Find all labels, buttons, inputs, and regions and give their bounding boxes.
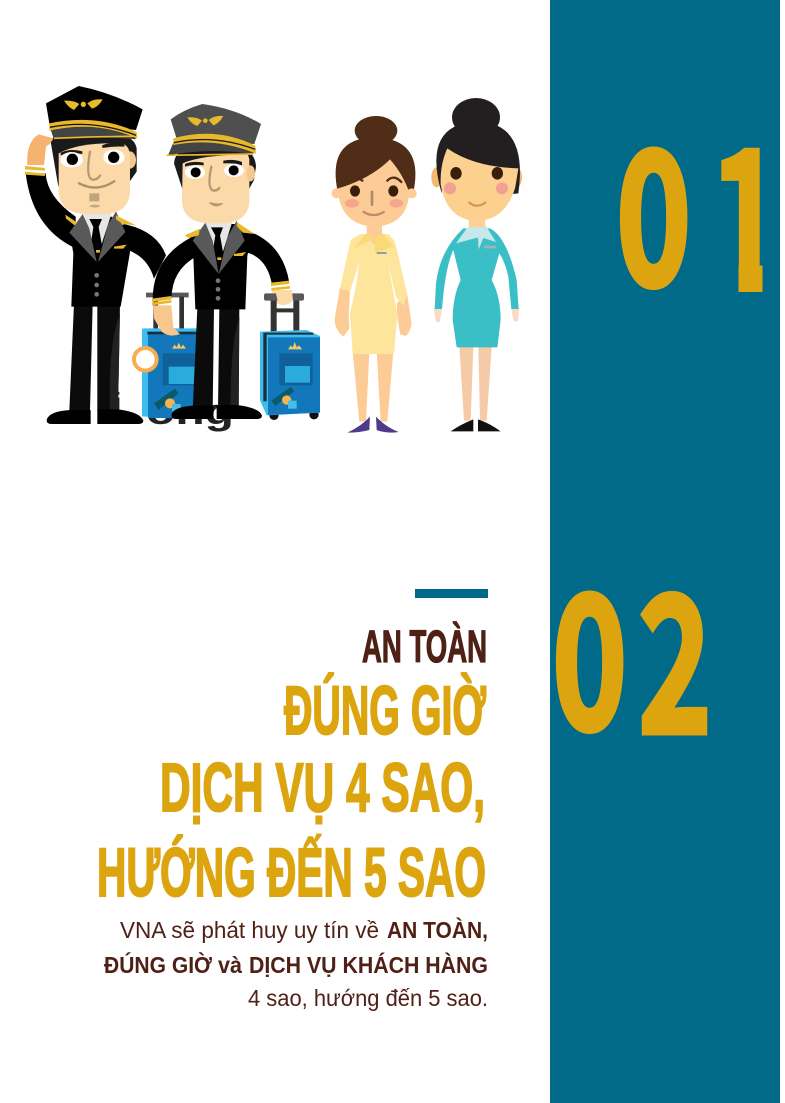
body text: DỊCH VỤ KHÁCH HÀNG [249,951,488,978]
face [441,148,518,221]
trousers [69,303,120,411]
collar [354,233,394,253]
body text [104,916,488,1011]
number 02: 0 [552,515,627,783]
lowered arm [123,224,166,279]
number 01: 1 [708,63,785,347]
buttons [94,273,99,297]
smile [469,203,485,206]
arms [335,287,412,337]
epaulettes [65,215,136,225]
cheeks [345,199,359,208]
shirt [205,222,232,252]
shirt [83,213,112,244]
raised cuff [25,166,45,176]
body text: và [218,952,242,978]
tie [89,219,102,255]
collar [456,226,496,249]
nose [368,192,376,205]
hat crown [171,104,261,144]
panel: teal column [550,0,780,1103]
hat band [173,134,256,154]
attendant in yellow [332,116,417,433]
heading line: dich vu 4 sao: DỊCH VỤ 4 SAO, [160,749,485,826]
raised arm [25,173,76,248]
smile [364,212,384,215]
brows [185,160,242,167]
hair [336,137,415,192]
brows [348,178,401,183]
hat wings [187,116,223,126]
legs [459,347,492,421]
mouth [209,203,223,206]
hands [434,308,519,322]
hat visor [168,140,255,155]
illustration: two flight attendants and second suitcase [260,98,522,433]
raised hand [27,134,53,165]
hair [174,150,256,193]
bun [355,116,397,145]
number 01 [616,63,785,347]
right hand and cuff [272,290,292,304]
eyes [185,166,205,179]
left cuff and hand [153,305,180,336]
face [337,159,409,227]
name badge [377,252,387,254]
shoes [347,417,399,433]
buttons [216,278,220,301]
jacket [190,224,252,309]
shoes [47,409,143,424]
badge [96,245,127,253]
heading line: dung gio: ĐÚNG GIỜ [284,672,486,749]
ear [124,151,136,169]
suitcase behind pilot [142,293,199,418]
accent bar [415,589,488,598]
body text: 4 sao, hướng đến 5 sao. [248,985,488,1011]
body text: ĐÚNG GIỜ [104,951,212,978]
nose [88,152,100,180]
neck [367,222,382,245]
watermark letters behind the illustration [114,387,234,432]
trousers [193,308,239,410]
hat visor [49,123,137,139]
shoes [451,419,501,431]
ear [246,165,255,181]
eyes [350,185,360,197]
ears [431,167,442,187]
badge [217,252,246,260]
hair [51,134,137,187]
second suitcase [260,291,320,420]
left arm [153,237,196,300]
tie [211,227,223,261]
ears [332,188,342,198]
cheeks [444,182,456,194]
jacket [69,217,130,307]
body text: AN TOÀN, [387,916,488,943]
lapels [69,211,125,262]
attendant in teal [431,98,522,431]
watermark letters behind the illustration: i [114,387,121,417]
epaulettes [185,222,255,238]
nose [209,167,219,191]
heading line: huong den 5 sao: HƯỚNG ĐẾN 5 SAO [97,834,486,911]
body text: VNA sẽ phát huy uy tín về [120,917,379,943]
number 02: 2 [638,513,712,788]
neck [469,215,485,238]
right arm [241,229,289,285]
legs [353,352,393,422]
number 01: 0 [616,71,691,339]
name badge [484,246,496,248]
brows [61,143,125,155]
illustration: two pilots with suitcases [25,86,292,424]
beard [89,193,101,208]
lapels [193,221,245,274]
pilot one [25,86,166,424]
face [59,143,130,214]
shoes [171,405,262,419]
heading [97,621,487,911]
face [182,155,249,223]
sleeves and dress [340,234,407,354]
smile [79,181,114,188]
hair [436,122,520,195]
eyes [60,152,83,167]
dress and sleeves [435,228,519,347]
heading line: an toan: AN TOÀN [362,621,487,672]
hat band [49,120,137,139]
hat crown [46,86,143,130]
orange ring [134,348,157,371]
pilot two [152,104,292,419]
number 02 [552,513,712,788]
hat wings [64,99,103,110]
bun [452,98,500,137]
eyes [450,167,462,180]
watermark letters behind the illustration: ong [146,391,234,432]
